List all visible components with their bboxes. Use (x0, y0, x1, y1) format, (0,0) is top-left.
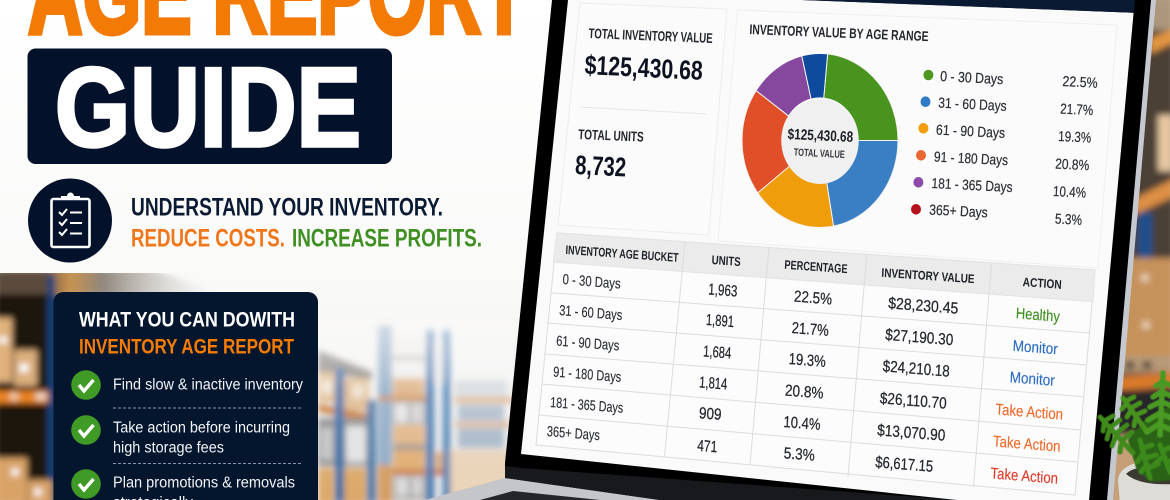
legend: 181 - 365 Days (931, 176, 1013, 196)
tagline: REDUCE COSTS. (131, 224, 285, 252)
row: 31-60 days: Monitor (1012, 338, 1058, 358)
potted plant (1100, 373, 1170, 500)
row: 181-365 days: 10.4% (783, 413, 821, 434)
item: plan promotions: Plan promotions & removals (113, 474, 295, 492)
row: 181-365 days: $13,070.90 (877, 421, 946, 445)
row: 91-180 days: 91 - 180 Days (553, 365, 622, 386)
donut center (782, 99, 858, 184)
legend: 19.3% (1058, 129, 1092, 147)
row: 365+ days: 365+ Days (546, 424, 600, 444)
legend: 365+ Days (929, 203, 988, 221)
donut (742, 54, 898, 227)
row: 0-30 days: $28,230.45 (888, 294, 959, 318)
card: donut chart (718, 10, 1117, 268)
laptop (425, 0, 1156, 500)
item: find slow inventory (71, 370, 303, 400)
title badge: GUIDE: GUIDE (55, 45, 361, 170)
legend: 91 - 180 Days (934, 150, 1008, 169)
table (536, 233, 1095, 495)
card: totals: $125,430.68 (584, 50, 703, 86)
icon: clipboard checklist (28, 178, 112, 262)
legend: 20.8% (1055, 157, 1090, 174)
row: 31-60 days: 1,891 (706, 311, 734, 331)
far shelf (455, 380, 507, 396)
donut center: TOTAL VALUE (793, 147, 845, 161)
card: totals: 8,732 (574, 150, 627, 183)
row: 61-90 days: $24,210.18 (882, 357, 950, 381)
bezel (505, 0, 1151, 500)
row: 365+ days: Take Action (990, 465, 1058, 488)
legend: 61 - 90 Days (936, 123, 1005, 142)
table header row (553, 233, 1095, 302)
legend: 0 - 30 Days (940, 69, 1004, 88)
row: 0-30 days: 0 - 30 Days (562, 272, 621, 293)
tagline: INCREASE PROFITS. (292, 224, 482, 252)
panel: what you can do (54, 292, 318, 500)
row: 61-90 days: 19.3% (788, 350, 826, 371)
chart heading: INVENTORY VALUE BY AGE RANGE (749, 21, 929, 44)
row: 91-180 days: 20.8% (785, 381, 824, 403)
table body (536, 233, 1095, 495)
row: 31-60 days: 21.7% (791, 319, 829, 340)
row: 61-90 days: 1,684 (703, 342, 732, 363)
laptop base (425, 478, 660, 500)
row: 0-30 days: Healthy (1015, 305, 1060, 326)
fern (1100, 373, 1170, 482)
legend: 5.3% (1055, 212, 1082, 229)
top strip (802, 0, 1135, 13)
item: take action: high storage fees (113, 440, 224, 456)
row: 61-90 days: Monitor (1009, 369, 1055, 390)
table header row: ACTION (1022, 275, 1062, 292)
total units: TOTAL UNITS (578, 126, 644, 145)
item: take action: Take action before incurring (113, 420, 290, 436)
row: 61-90 days: 61 - 90 Days (556, 334, 620, 355)
table header row: INVENTORY VALUE (881, 266, 975, 286)
legend: 22.5% (1062, 74, 1098, 92)
row: 91-180 days: Take Action (995, 401, 1063, 424)
row: 0-30 days: 1,963 (708, 280, 738, 301)
tagline: UNDERSTAND YOUR INVENTORY. (131, 194, 443, 222)
row: 181-365 days: 181 - 365 Days (550, 395, 624, 417)
table header row: PERCENTAGE (784, 258, 848, 276)
item: find slow inventory: Find slow & inactive inventory (113, 376, 303, 394)
row: 31-60 days: $27,190.30 (885, 326, 954, 349)
shelf A (318, 350, 372, 380)
row: 31-60 days (559, 303, 1058, 358)
item: plan promotions (71, 469, 295, 500)
screen (521, 0, 1134, 500)
row: 61-90 days (556, 334, 1055, 390)
warehouse background left (0, 268, 513, 500)
row: 365+ days: 5.3% (783, 444, 815, 465)
panel heading: INVENTORY AGE REPORT (79, 334, 294, 358)
row: 91-180 days: $26,110.70 (879, 389, 947, 413)
warehouse background right (1100, 0, 1170, 500)
lid edge (1106, 0, 1156, 500)
legend: 31 - 60 Days (938, 96, 1007, 115)
pot (1118, 463, 1170, 500)
row: 365+ days: 471 (697, 437, 718, 456)
shelf B (378, 325, 392, 500)
row: 91-180 days (553, 365, 1063, 424)
row: 0-30 days: 22.5% (794, 288, 832, 309)
tagline (131, 194, 482, 252)
row: 181-365 days (550, 395, 1061, 456)
row: 31-60 days: 31 - 60 Days (559, 303, 623, 324)
row: 181-365 days: 909 (699, 404, 722, 424)
legend: 21.7% (1060, 102, 1094, 119)
table header row: UNITS (711, 253, 741, 269)
row: 0-30 days (562, 272, 1060, 326)
card: totals (558, 3, 727, 235)
panel heading: WHAT YOU CAN DOWITH (79, 308, 295, 332)
panel heading (79, 308, 295, 358)
row: 181-365 days: Take Action (993, 433, 1061, 456)
row: 365+ days (546, 424, 1058, 488)
row: 91-180 days: 1,814 (699, 373, 728, 394)
item: take action (71, 415, 290, 456)
legend: 10.4% (1053, 184, 1086, 202)
legend (911, 69, 1098, 229)
donut center: $125,430.68 (787, 126, 854, 146)
table header row: INVENTORY AGE BUCKET (565, 243, 679, 265)
row: 365+ days: $6,617.15 (875, 453, 934, 476)
total inventory value: TOTAL INVENTORY VALUE (588, 25, 713, 46)
